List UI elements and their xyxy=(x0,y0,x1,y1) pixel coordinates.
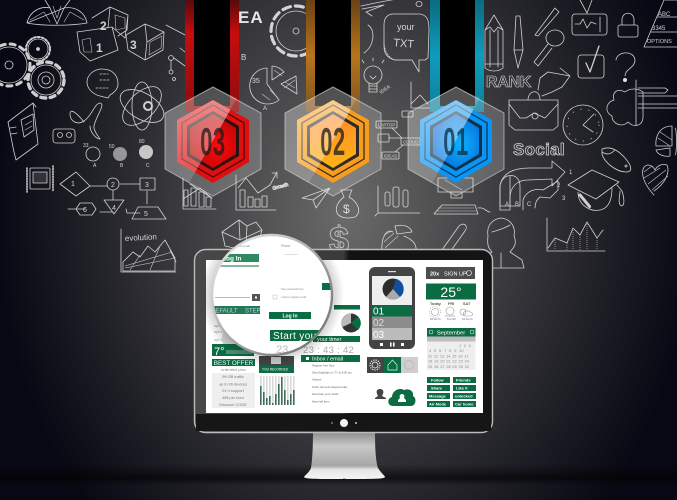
doodle: dollar: $ xyxy=(329,219,349,260)
text: cube numbers: 1 xyxy=(96,41,103,55)
doodle: chart pies row xyxy=(83,139,153,169)
day labels: Today xyxy=(430,302,442,306)
offer list left xyxy=(214,323,224,342)
doodle: cloud xyxy=(607,89,643,125)
text: pyramid labels xyxy=(647,12,672,45)
login button: Log In xyxy=(282,314,298,320)
doodle: atom xyxy=(115,80,169,132)
weather widget xyxy=(426,284,476,321)
calendar header: September xyxy=(437,330,465,336)
best offer panel xyxy=(212,359,255,408)
temperature tile xyxy=(212,344,254,358)
text: arrow labels: 3 xyxy=(562,196,566,202)
doodle: bar chart left xyxy=(183,178,216,209)
screen icon xyxy=(271,357,281,364)
small pie xyxy=(342,314,361,332)
weather values xyxy=(430,317,473,321)
number: 02 xyxy=(320,119,346,164)
doodle: paper plane xyxy=(302,188,330,208)
offer list left: opt in xyxy=(214,329,224,334)
text: mind map labels: CLOUD xyxy=(403,140,418,144)
coloured hexagon xyxy=(420,100,492,183)
doodle: lock xyxy=(618,13,638,37)
donut percentage: % xyxy=(232,337,240,347)
inbox rows: Order the best shaped today xyxy=(312,385,348,389)
flowchart: 2 xyxy=(111,182,115,189)
text: pyramid labels: ABC xyxy=(658,12,671,18)
core hexagon xyxy=(310,114,356,168)
doodle: lotus xyxy=(27,0,87,25)
doodle: growth chart xyxy=(236,172,289,210)
flowchart xyxy=(60,172,166,219)
checkbox labels xyxy=(281,288,307,299)
glass highlight xyxy=(285,87,357,183)
doodle: gears xyxy=(0,37,64,98)
thin ring xyxy=(425,105,487,177)
right led xyxy=(355,422,357,424)
default step band xyxy=(214,306,260,314)
coloured hexagon xyxy=(297,100,369,183)
doodle: speech bubble your text: TXT xyxy=(393,37,415,51)
green header: YOU RECORDED xyxy=(262,368,289,372)
monitor xyxy=(194,250,492,432)
day labels xyxy=(430,302,471,306)
sound panel xyxy=(259,356,295,405)
doodle: pie 35: 35 xyxy=(252,78,260,85)
row 01: 01 xyxy=(373,306,385,318)
home tile xyxy=(384,357,401,373)
flowchart: 6 xyxy=(83,207,87,214)
chart: line peaks xyxy=(547,218,605,251)
sign up bar: SIGN UP xyxy=(444,272,467,278)
left led xyxy=(331,422,333,424)
doodle: number cubes xyxy=(77,7,164,61)
doodle: chart pies row: 50 xyxy=(109,144,115,150)
doodle: scribble xyxy=(361,0,398,16)
text: arrow labels: 1 xyxy=(569,170,573,176)
floor shadow xyxy=(0,464,677,486)
text: pyramid labels: OPTIONS xyxy=(647,39,672,45)
doodle: graduation cap xyxy=(568,170,624,210)
phone speaker xyxy=(388,271,396,272)
doodle: chart pies row: 33 xyxy=(83,143,89,149)
doodle: magnifier xyxy=(534,30,564,66)
settings tile xyxy=(367,357,384,373)
text: cube numbers: 3 xyxy=(130,38,137,52)
calendar dates: 4 5 6 7 8 9 10 xyxy=(429,348,464,353)
inbox header: Inbox / email xyxy=(312,356,343,362)
chart: evolution xyxy=(121,229,176,272)
text: pyramid labels: 3345 xyxy=(652,26,666,32)
button like it: Like it xyxy=(456,386,468,390)
doodle: swirl xyxy=(70,103,102,139)
lens contents xyxy=(214,244,331,353)
doodle: growth chart: Growth xyxy=(272,182,289,192)
button message: Message xyxy=(429,394,447,398)
button share: Share xyxy=(431,386,443,390)
offer rows: 24 h support xyxy=(222,388,245,393)
bar chart xyxy=(260,376,295,405)
ribbon: orange xyxy=(306,0,360,112)
text: RANK: RANK xyxy=(486,74,532,91)
button car home: Car home xyxy=(455,402,474,406)
text: cube numbers: 2 xyxy=(100,19,107,33)
doodle: chart pies row: A xyxy=(93,163,97,169)
doodle: node diagram xyxy=(166,25,185,80)
medal 01 xyxy=(408,87,504,196)
flowchart: 3 xyxy=(145,182,149,189)
timer digits: 23 : 43 : 42 xyxy=(303,345,354,356)
temperature tile: 7° xyxy=(214,346,225,358)
doodle: light bulb: IDEA xyxy=(379,84,392,96)
temperature: 25° xyxy=(440,284,462,300)
text: arrow labels: 2 xyxy=(557,183,561,189)
doodle: cubes center xyxy=(222,220,262,250)
doodle: arrows xyxy=(500,161,565,210)
doodle: clock xyxy=(563,105,603,145)
calendar dates xyxy=(428,343,471,369)
doodle: money bag xyxy=(336,190,359,218)
mind map xyxy=(376,111,420,159)
doodle: ellipse xyxy=(416,2,422,6)
doodle: speech bubble your text: your xyxy=(397,22,415,32)
doodle: pyramid xyxy=(644,0,677,47)
user icon xyxy=(375,389,386,399)
doodle: pencils xyxy=(485,8,559,71)
inbox rows: Have left then xyxy=(312,400,330,404)
chart: abc bars xyxy=(375,186,420,216)
password line xyxy=(284,254,298,255)
number: 03 xyxy=(200,119,226,164)
dark ring xyxy=(307,111,359,171)
doodle: axis and small arrow xyxy=(411,82,435,108)
doodle: book xyxy=(8,103,38,160)
doodle: computer and keyboard xyxy=(434,178,490,214)
lens xyxy=(212,235,332,355)
text: mind map labels: IDEAS xyxy=(384,154,397,158)
offer rows: 99 GB traffic xyxy=(222,374,244,379)
weather values: 5 km/h xyxy=(447,317,456,321)
button unlocked: unlocked xyxy=(455,394,473,398)
search input xyxy=(215,294,260,301)
core hexagon xyxy=(190,114,236,168)
offer table xyxy=(212,373,255,408)
doodle: pie 35: A xyxy=(263,106,267,112)
glass hexagon xyxy=(408,87,504,196)
doodle: speech bubble your text xyxy=(384,14,429,72)
bezel xyxy=(194,250,492,432)
glass hexagon xyxy=(165,87,261,196)
coloured hexagon xyxy=(177,100,249,183)
green buttons xyxy=(427,377,476,407)
inbox rows xyxy=(312,364,353,404)
doodle: pie 35 xyxy=(250,66,297,112)
text: B: B xyxy=(241,53,246,62)
offer rows: up to 99 devices xyxy=(219,382,247,386)
doodle: light bulb xyxy=(362,58,392,96)
row 02: 02 xyxy=(373,318,385,329)
inner shine xyxy=(297,100,350,172)
inbox widget xyxy=(301,355,360,404)
flowchart: 1 xyxy=(71,181,75,188)
doodle: speech bubble small xyxy=(87,69,118,98)
phone controls xyxy=(380,342,404,346)
lens rim xyxy=(212,235,332,355)
glass highlight xyxy=(165,87,237,183)
checkbox xyxy=(273,295,277,299)
doodle: chart pies row: B xyxy=(120,163,124,169)
doodle: chart pies row: 80 xyxy=(139,139,145,145)
default step band: STEP xyxy=(245,308,261,314)
offer list left: opt in xyxy=(214,337,224,342)
text: EA: EA xyxy=(238,8,264,27)
inbox rows: Register free Now xyxy=(312,364,335,368)
ribbon: red xyxy=(185,0,239,112)
number: 01 xyxy=(443,119,469,164)
dark header xyxy=(259,356,294,366)
icon strip xyxy=(367,357,418,373)
monitor stand xyxy=(304,432,385,479)
login underline xyxy=(220,266,259,267)
chalk doodles xyxy=(0,0,677,272)
sign up bar xyxy=(426,267,475,279)
doodle: woman xyxy=(478,218,524,268)
doodle: pie right xyxy=(656,126,676,156)
text: mind map labels xyxy=(378,122,418,158)
weather icons xyxy=(430,306,472,318)
day labels: FRI xyxy=(448,302,454,306)
doodle: glasses xyxy=(538,68,570,96)
text: Social: Social xyxy=(513,140,565,159)
text: arrow labels: B xyxy=(515,202,519,208)
flowchart: 5 xyxy=(144,211,148,218)
phone pie xyxy=(382,278,404,300)
doodle: heart xyxy=(643,164,668,195)
medal 02 xyxy=(285,87,381,196)
offer rows: Discount CODE xyxy=(219,402,247,407)
default step band: DEFAULT xyxy=(211,308,238,314)
doodle: tag xyxy=(53,129,75,143)
doodle: question mark xyxy=(616,53,635,76)
doodle: pie center xyxy=(382,225,416,252)
checkbox labels: Save password here xyxy=(281,288,304,291)
thin ring xyxy=(182,105,244,177)
offer rows: 45$ per hour xyxy=(222,395,245,400)
weather values: 10 km/h xyxy=(462,317,473,321)
inbox rows: Send highlight on TY at 8:00 pm xyxy=(312,370,353,374)
inbox rows: Reminder your inside xyxy=(312,392,339,396)
dark ring xyxy=(187,111,239,171)
password label: Phone xyxy=(281,244,290,248)
timer widget xyxy=(303,336,360,356)
email label: Enter your email xyxy=(228,244,250,248)
doodle: signs xyxy=(636,80,677,125)
text: arrow labels: C xyxy=(527,202,532,208)
power button xyxy=(340,419,348,427)
phone widget xyxy=(369,267,415,349)
doodle: money bag: $ xyxy=(343,202,350,216)
thin ring xyxy=(302,105,364,177)
medal 03 xyxy=(165,87,261,196)
lens right green tab xyxy=(322,283,331,290)
calendar widget xyxy=(427,328,476,370)
text: arrow labels xyxy=(505,170,573,208)
doodle: check box xyxy=(578,46,604,78)
calendar body xyxy=(427,342,476,370)
login title: Log In xyxy=(222,256,242,262)
button follow: Follow xyxy=(431,378,445,382)
start banner: Start your xyxy=(273,331,321,342)
doodle: TV xyxy=(572,0,607,35)
doodle: chart pies row: C xyxy=(146,163,150,169)
offer subtitle: unlimited plan xyxy=(221,367,246,372)
inbox rows: Artwork xyxy=(312,378,322,382)
calendar dates: 25 26 27 28 29 30 31 xyxy=(428,364,469,369)
core hexagon xyxy=(433,114,479,168)
day labels: SAT xyxy=(463,302,471,306)
glass highlight xyxy=(408,87,480,183)
offer list left: opt in xyxy=(214,323,224,328)
doodle: left arc xyxy=(364,25,373,53)
doodle: dash at left xyxy=(170,250,176,262)
row 03: 03 xyxy=(373,330,385,341)
phone body xyxy=(369,267,415,349)
clock tile xyxy=(401,357,418,373)
text: cube numbers xyxy=(96,19,137,55)
offer rows xyxy=(219,374,247,407)
magnifier xyxy=(205,235,340,356)
inner shine xyxy=(177,100,230,172)
calendar dates: 1 2 3 xyxy=(459,343,471,348)
calendar dates: 18 19 20 21 22 23 24 xyxy=(428,358,470,364)
calendar weekdays xyxy=(427,336,476,342)
best offer title: BEST OFFER xyxy=(214,360,254,367)
doodle: question dot xyxy=(623,78,627,82)
checkbox labels: I want to register email xyxy=(281,296,307,299)
donut percentage xyxy=(222,322,254,354)
screen xyxy=(206,260,483,413)
doodle: big gear xyxy=(271,6,321,56)
start digits: 23 xyxy=(276,344,288,356)
ribbon: blue xyxy=(430,0,484,112)
flowchart: 4 xyxy=(112,205,116,212)
doodle: arch tablet xyxy=(500,176,520,206)
doodle: chip xyxy=(27,166,53,192)
glass hexagon xyxy=(285,87,381,196)
text: mind map labels: LAPTOP xyxy=(378,122,395,128)
sign up bar: 20x xyxy=(430,272,440,278)
weather values: 20 km/h xyxy=(430,317,441,321)
chin xyxy=(196,414,491,431)
small login tag xyxy=(334,305,360,310)
phone screen xyxy=(372,276,412,305)
calendar dates: 11 12 13 14 15 16 17 xyxy=(428,354,469,358)
dark ring xyxy=(430,111,482,171)
doodle: briefcase xyxy=(509,92,558,130)
doodle: diagonal pencil xyxy=(442,224,466,252)
doodle: mouse xyxy=(602,148,631,172)
timer label: your timer xyxy=(317,337,342,343)
button air mode: Air Mode xyxy=(429,402,447,406)
chart: evolution: evolution xyxy=(125,232,157,243)
text: arrow labels: A xyxy=(505,202,509,208)
magnifier lens shadow xyxy=(206,260,342,364)
cloud icon xyxy=(388,389,415,406)
inner shine xyxy=(420,100,474,172)
button friends: Friends xyxy=(456,378,471,382)
